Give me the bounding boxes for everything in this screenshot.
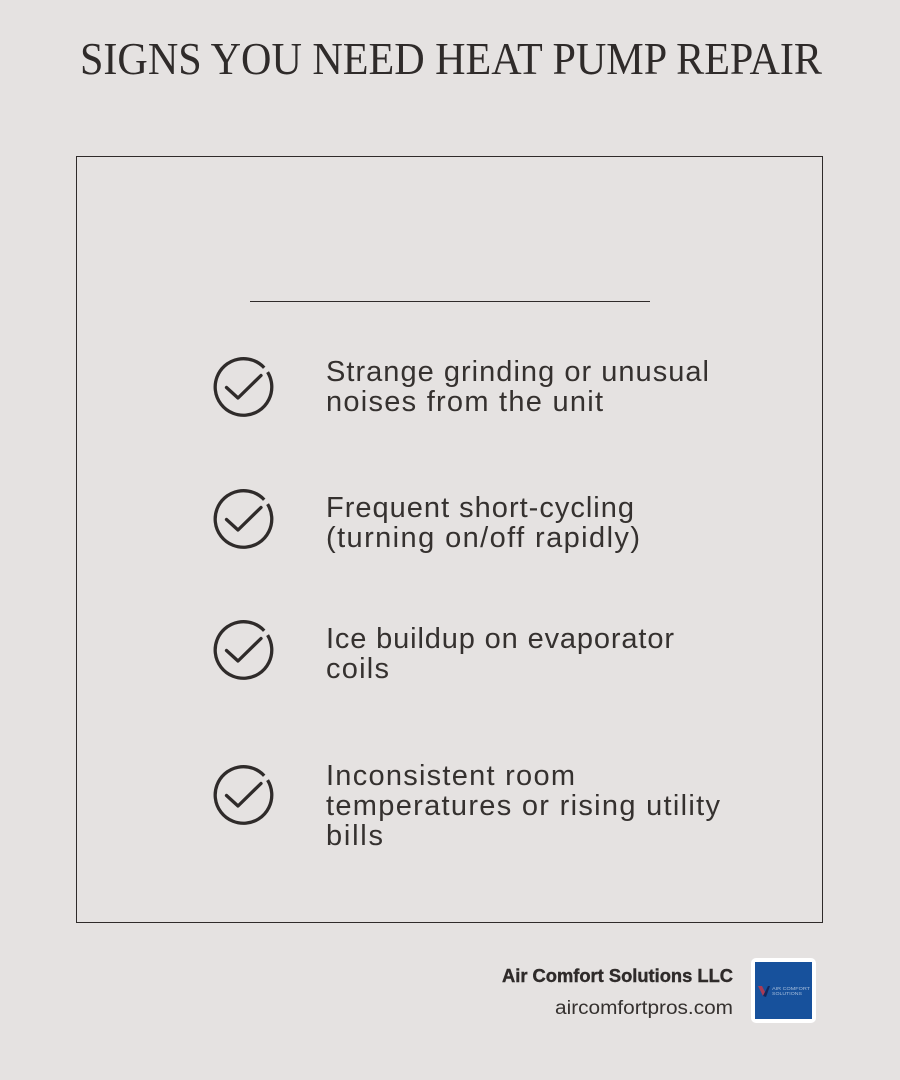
title: SIGNS YOU NEED HEAT PUMP REPAIR — [80, 33, 822, 84]
icon: check 1 — [215, 359, 272, 415]
panel: signs list — [76, 156, 822, 922]
text: sign 4: bills — [326, 820, 383, 852]
text: sign 1: Strange grinding or unusual — [326, 356, 709, 388]
footer: company name: Air Comfort Solutions LLC — [502, 966, 733, 986]
text: sign 1: noises from the unit — [326, 386, 603, 418]
text: sign 4 — [326, 760, 720, 852]
text: sign 3 — [326, 623, 674, 685]
icon: company logo: SOLUTIONS — [772, 991, 802, 996]
text: sign 3: Ice buildup on evaporator — [326, 623, 674, 655]
text: sign 2 — [326, 492, 640, 554]
text: sign 3: coils — [326, 653, 389, 685]
text: sign 2: Frequent short-cycling — [326, 492, 634, 524]
icon: company logo: AIR COMFORT — [772, 986, 810, 991]
icon: check 4 — [215, 767, 272, 823]
text: sign 4: temperatures or rising utility — [326, 790, 720, 822]
text: sign 2: (turning on/off rapidly) — [326, 522, 640, 554]
icon: check 2 — [215, 491, 272, 547]
icon: company logo — [751, 958, 816, 1023]
text: sign 1 — [326, 356, 709, 418]
footer: website: aircomfortpros.com — [555, 998, 733, 1019]
icon: check 3 — [215, 622, 272, 678]
text: sign 4: Inconsistent room — [326, 760, 575, 792]
